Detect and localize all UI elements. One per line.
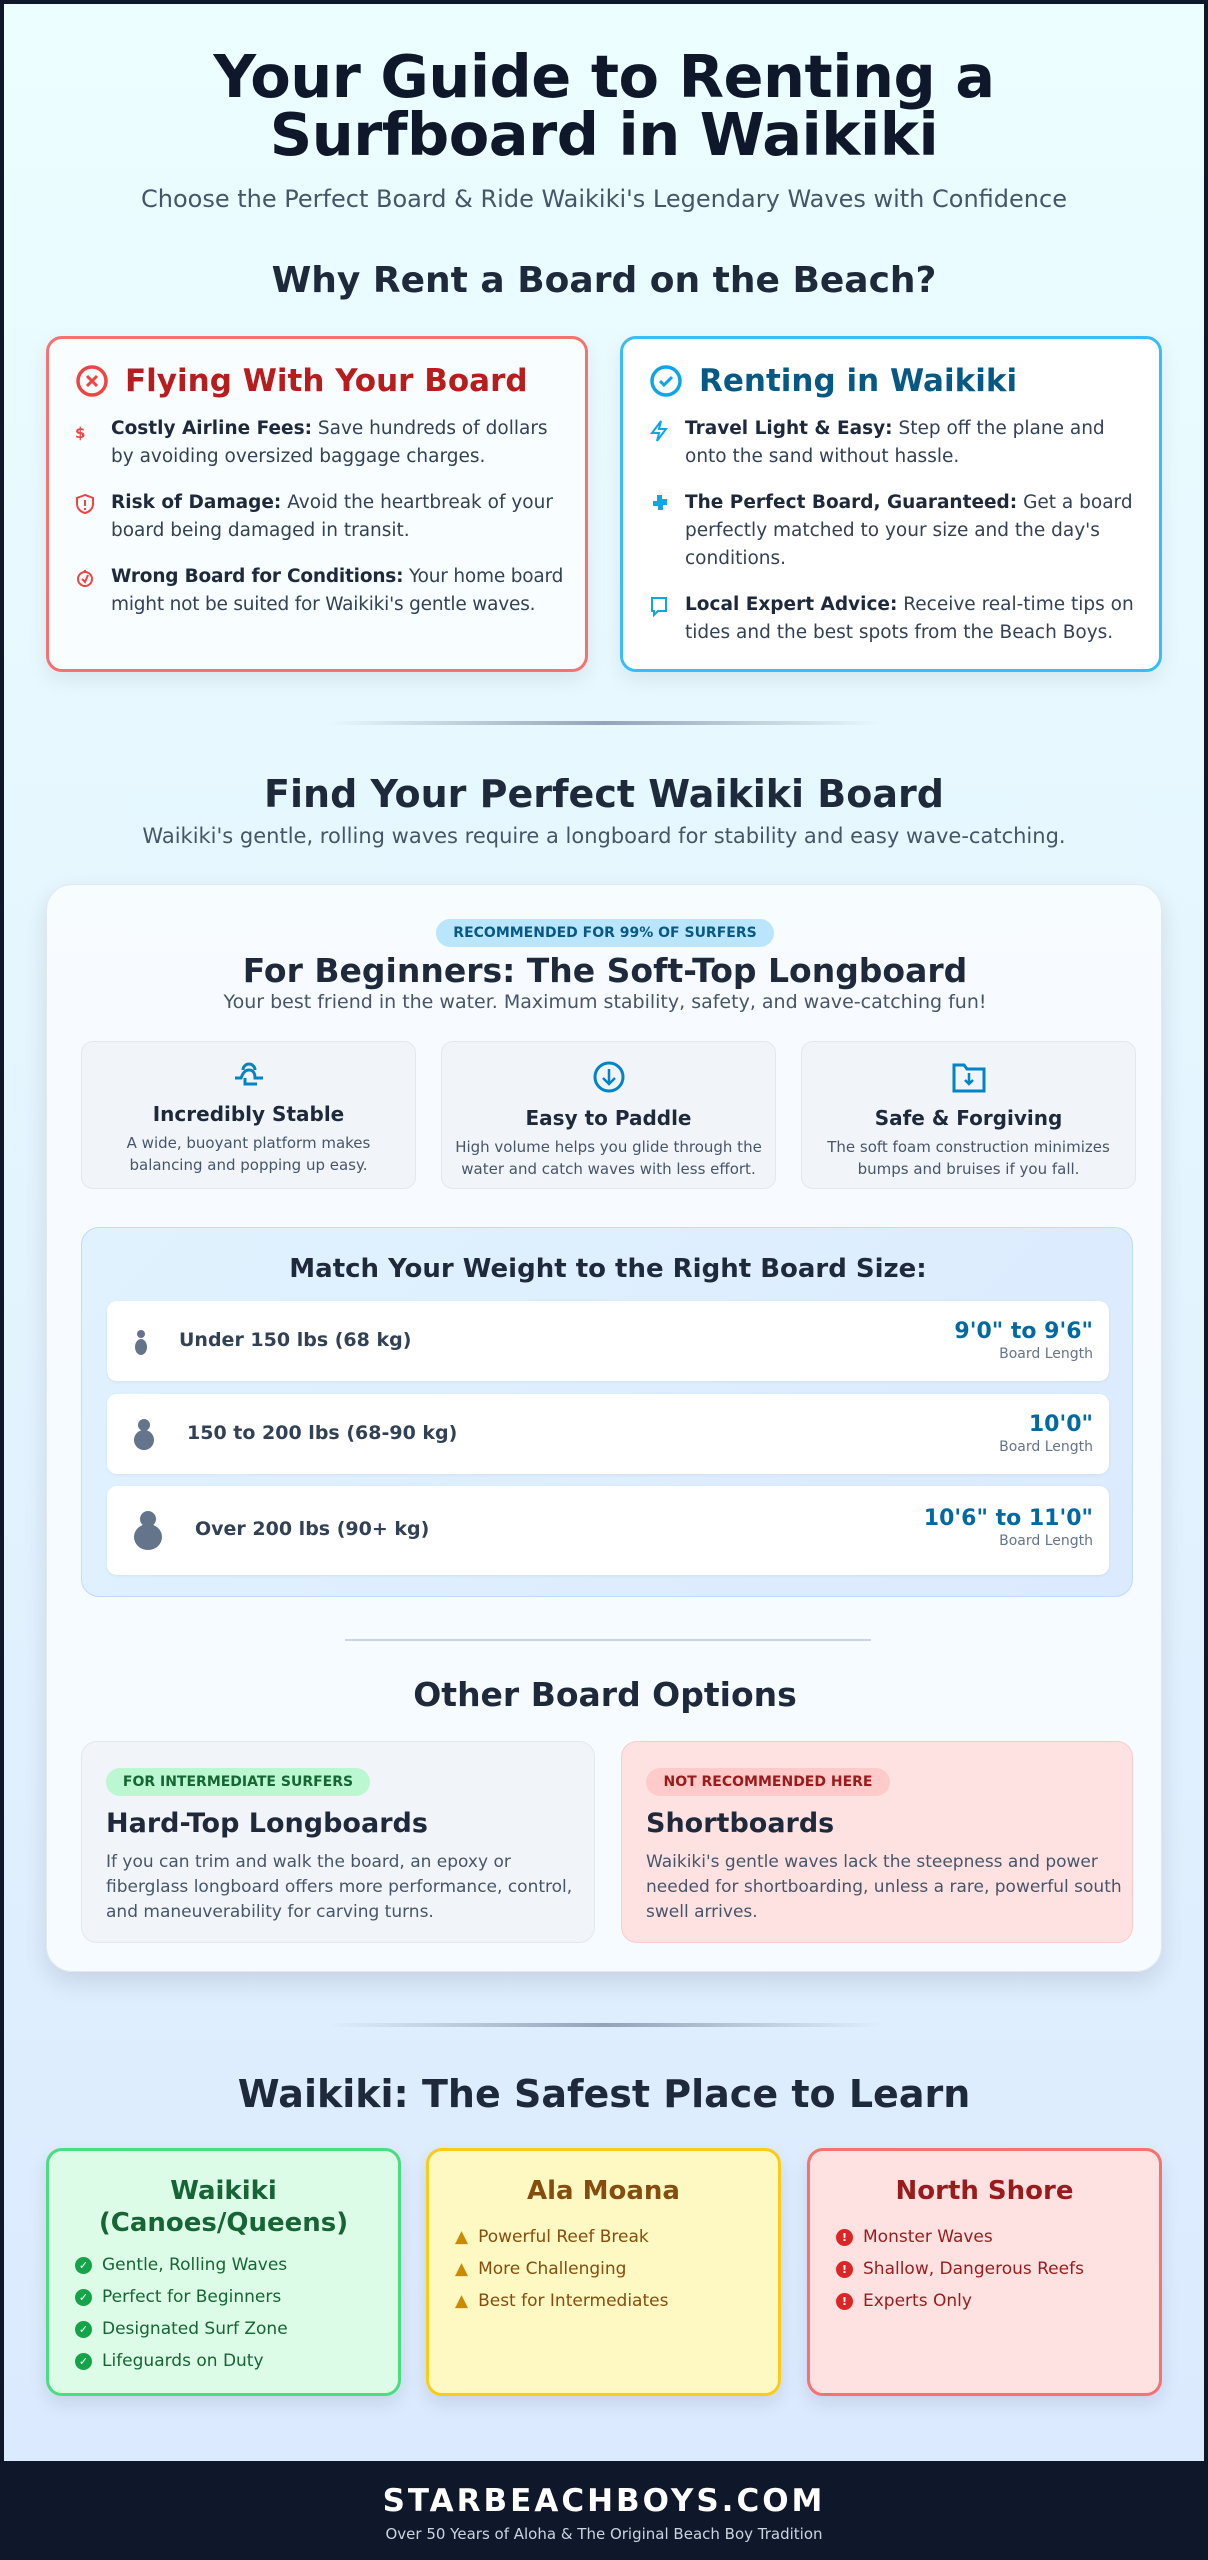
- location: ala moana: ▲: [455, 2227, 468, 2247]
- location: waikiki: Designated Surf Zone: [102, 2319, 288, 2339]
- heading: safest place: Waikiki: The Safest Place to Learn: [238, 2072, 970, 2116]
- row: under 150: 9'0" to 9'6": [954, 1319, 1093, 1344]
- panel: flying with your board: Wrong Board for Conditions: Your home board might not be suited for Waikiki's gentle waves.: [111, 566, 563, 615]
- title: Surfboard in Waikiki: [270, 100, 938, 169]
- card title: Renting in Waikiki: [699, 363, 1017, 399]
- badge: RECOMMENDED FOR 99% OF SURFERS: [453, 925, 757, 941]
- location: waikiki: [46, 2148, 401, 2396]
- panel: renting in waikiki: onto the sand without hassle.: [685, 446, 959, 467]
- row: 150-200: [107, 1394, 1109, 1474]
- row: over 200: Board Length: [999, 1533, 1093, 1549]
- feature: safe: bumps and bruises if you fall.: [858, 1160, 1079, 1178]
- panel: flying with your board: $: [75, 424, 85, 442]
- row: 150-200: Board Length: [999, 1439, 1093, 1455]
- location: north shore: !: [842, 2294, 847, 2308]
- location: north shore: Experts Only: [863, 2291, 972, 2311]
- heading: why rent: Why Rent a Board on the Beach?: [272, 260, 936, 301]
- location: ala moana: Ala Moana: [527, 2176, 680, 2206]
- location: north shore: [807, 2148, 1162, 2396]
- location: north shore: Shallow, Dangerous Reefs: [863, 2259, 1084, 2279]
- panel: weight chart: [81, 1227, 1133, 1597]
- location: waikiki: ✓: [79, 2290, 88, 2304]
- location: ala moana: [426, 2148, 781, 2396]
- option: hard-top: [81, 1741, 595, 1943]
- footer: [0, 2461, 1208, 2560]
- feature: paddle: water and catch waves with less effort.: [461, 1160, 756, 1178]
- chart heading: Match Your Weight to the Right Board Size:: [289, 1254, 927, 1284]
- panel: board finder: [46, 884, 1162, 1972]
- panel: renting in waikiki: Travel Light & Easy: Step off the plane and: [685, 418, 1105, 439]
- beginner heading: For Beginners: The Soft-Top Longboard: [243, 951, 967, 990]
- location: north shore: North Shore: [896, 2176, 1074, 2206]
- panel: flying with your board: Costly Airline Fees: Save hundreds of dollars: [111, 418, 548, 439]
- location: north shore: !: [842, 2262, 847, 2276]
- title: [212, 42, 995, 169]
- beginner subtitle: Your best friend in the water. Maximum stability, safety, and wave-catching fun!: [223, 991, 986, 1013]
- option: shortboards: Waikiki's gentle waves lack the steepness and power needed for shortboarding, unless a rare, powerful south swell arrives.: [646, 1852, 1122, 1922]
- feature: safe: The soft foam construction minimizes: [827, 1138, 1110, 1156]
- location: north shore: Monster Waves: [863, 2227, 993, 2247]
- location: ala moana: ▲: [455, 2291, 468, 2311]
- location: waikiki: Waikiki: [170, 2176, 277, 2206]
- option: hard-top: Hard-Top Longboards: [106, 1808, 428, 1839]
- card title: Flying With Your Board: [125, 363, 528, 399]
- feature: paddle: Easy to Paddle: [526, 1106, 692, 1130]
- row: 150-200: 10'0": [1029, 1412, 1093, 1437]
- option: shortboards: NOT RECOMMENDED HERE: [663, 1774, 872, 1790]
- location: north shore: !: [842, 2230, 847, 2244]
- option: hard-top: FOR INTERMEDIATE SURFERS: [123, 1774, 353, 1790]
- location: waikiki: Perfect for Beginners: [102, 2287, 281, 2307]
- location: waikiki: (Canoes/Queens): [99, 2208, 348, 2238]
- title: Your Guide to Renting a: [213, 42, 995, 111]
- location: ala moana: ▲: [455, 2259, 468, 2279]
- location: waikiki: ✓: [79, 2322, 88, 2336]
- row: under 150: [107, 1301, 1109, 1381]
- badge: [436, 919, 774, 947]
- panel: flying with your board: Risk of Damage: Avoid the heartbreak of your: [111, 492, 553, 513]
- feature: paddle: High volume helps you glide through the: [455, 1138, 762, 1156]
- panel: renting in waikiki: The Perfect Board, Guaranteed: Get a board perfectly matched to your size and the day's conditions.: [685, 492, 1133, 569]
- footer: STARBEACHBOYS.COM: [383, 2483, 825, 2519]
- subtitle: Choose the Perfect Board & Ride Waikiki's Legendary Waves with Confidence: [141, 185, 1067, 213]
- location: waikiki: Gentle, Rolling Waves: [102, 2255, 287, 2275]
- location: waikiki: ✓: [79, 2258, 88, 2272]
- row: under 150: Board Length: [999, 1346, 1093, 1362]
- location: waikiki: Lifeguards on Duty: [102, 2351, 264, 2371]
- location: waikiki: ✓: [79, 2354, 88, 2368]
- feature: stable: Incredibly Stable: [153, 1102, 344, 1126]
- heading: other options: Other Board Options: [413, 1675, 797, 1714]
- feature: stable: [81, 1041, 416, 1189]
- option: hard-top: If you can trim and walk the board, an epoxy or fiberglass longboard offers more performance, control, and maneuverability for carving turns.: [106, 1852, 572, 1922]
- row: over 200: 10'6" to 11'0": [924, 1506, 1093, 1531]
- feature: safe: Safe & Forgiving: [875, 1106, 1062, 1130]
- feature: safe: [801, 1041, 1136, 1189]
- panel: flying with your board: by avoiding oversized baggage charges.: [111, 446, 485, 467]
- row: 150-200: 150 to 200 lbs (68-90 kg): [187, 1422, 457, 1444]
- panel: flying with your board: board being damaged in transit.: [111, 520, 410, 541]
- panel: flying with your board: [46, 336, 588, 672]
- feature: stable: balancing and popping up easy.: [129, 1156, 368, 1174]
- panel: renting in waikiki: [620, 336, 1162, 672]
- location: ala moana: Powerful Reef Break: [478, 2227, 649, 2247]
- row: over 200: [107, 1486, 1109, 1575]
- location: ala moana: Best for Intermediates: [478, 2291, 668, 2311]
- heading: find board: Find Your Perfect Waikiki Board: [264, 772, 944, 816]
- row: over 200: Over 200 lbs (90+ kg): [195, 1518, 429, 1540]
- subtitle: Waikiki's gentle, rolling waves require a longboard for stability and easy wave-catching.: [142, 824, 1066, 848]
- footer: Over 50 Years of Aloha & The Original Beach Boy Tradition: [385, 2525, 823, 2543]
- option: shortboards: [621, 1741, 1133, 1943]
- feature: paddle: [441, 1041, 776, 1189]
- panel: renting in waikiki: Local Expert Advice: Receive real-time tips on tides and the best spots from the Beach Boys.: [685, 594, 1134, 643]
- location: ala moana: More Challenging: [478, 2259, 626, 2279]
- feature: stable: A wide, buoyant platform makes: [127, 1134, 370, 1152]
- option: shortboards: Shortboards: [646, 1808, 834, 1839]
- row: under 150: Under 150 lbs (68 kg): [179, 1329, 411, 1351]
